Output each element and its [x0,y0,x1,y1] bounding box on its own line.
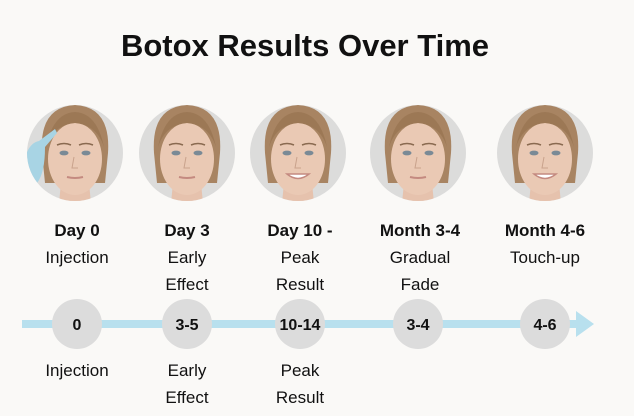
face 2: early [139,105,235,203]
bottom labels [45,361,324,407]
top labels: Month 3-4 [380,221,461,240]
title: Botox Results Over Time [121,28,489,63]
timeline markers: 3-5 [175,317,199,334]
top labels: Month 4-6 [505,221,585,240]
top labels: Day 0 [54,221,100,240]
arrow timeline [22,311,594,337]
bottom labels: Result [276,388,324,407]
bottom labels: Peak [281,361,320,380]
top labels: Peak [281,248,320,267]
timeline markers [52,299,570,349]
top labels: Day 3 [164,221,210,240]
top labels: Effect [165,275,209,294]
face 4: fade [370,105,466,203]
top labels: Fade [401,275,439,294]
face 3: peak [250,105,346,203]
top labels: Touch-up [510,248,580,267]
bottom labels: Effect [165,388,209,407]
timeline markers: 4-6 [533,317,557,334]
bottom labels: Injection [45,361,109,380]
top labels: Day 10 - [267,221,333,240]
top labels: Result [276,275,324,294]
timeline markers: 3-4 [406,317,430,334]
timeline markers: 0 [73,317,82,334]
face 1: injection [25,105,123,203]
timeline markers: 10-14 [280,317,321,334]
bottom labels: Early [168,361,207,380]
top labels: Early [168,248,207,267]
top labels: Injection [45,248,109,267]
top labels [45,221,585,294]
top labels: Gradual [390,248,450,267]
face 5: touch-up [497,105,593,203]
